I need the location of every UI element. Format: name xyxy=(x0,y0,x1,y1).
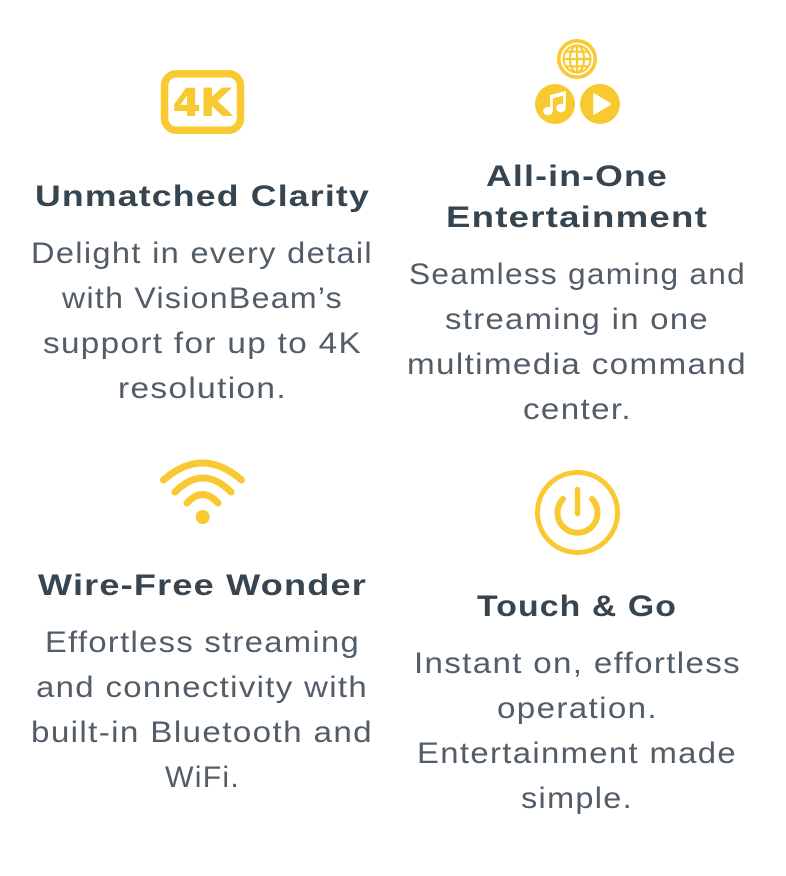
panel: Wire-Free Wonder xyxy=(31,463,373,794)
text: Touch & Go description xyxy=(414,647,741,815)
text: Wire-Free Wonder description: Effortless streaming xyxy=(45,626,360,659)
icon: 4K badge: 4K xyxy=(173,82,232,124)
icon: globe, music and play xyxy=(535,41,620,124)
text: All-in-One Entertainment description: multimedia command xyxy=(407,348,747,381)
panel: Unmatched Clarity xyxy=(31,74,373,405)
icon: globe xyxy=(559,41,595,77)
text: All-in-One Entertainment description: center. xyxy=(523,393,632,426)
text: Wire-Free Wonder description xyxy=(31,626,373,794)
heading: Touch & Go: Touch & Go xyxy=(477,590,677,623)
text: All-in-One Entertainment description: Seamless gaming and xyxy=(409,258,746,291)
heading: All-in-One Entertainment xyxy=(446,160,708,234)
text: Unmatched Clarity description xyxy=(31,237,373,405)
text: Unmatched Clarity description: with VisionBeam’s xyxy=(61,282,343,315)
icon: power button xyxy=(538,472,618,552)
heading: All-in-One Entertainment: Entertainment xyxy=(446,201,708,234)
text: Wire-Free Wonder description: and connectivity with xyxy=(36,671,368,704)
heading: Unmatched Clarity: Unmatched Clarity xyxy=(35,180,370,213)
text: Unmatched Clarity description: support for up to 4K xyxy=(43,327,362,360)
text: Touch & Go description: operation. xyxy=(497,692,658,725)
text: Wire-Free Wonder description: built-in Bluetooth and xyxy=(31,716,373,749)
text: Touch & Go description: Instant on, effortless xyxy=(414,647,741,680)
text: Touch & Go description: simple. xyxy=(521,782,633,815)
text: All-in-One Entertainment description xyxy=(407,258,747,426)
icon: 4K badge xyxy=(164,74,240,130)
text: Touch & Go description: Entertainment made xyxy=(417,737,737,770)
icon: music note xyxy=(535,84,575,124)
text: Unmatched Clarity description: Delight in every detail xyxy=(31,237,373,270)
icon: play button xyxy=(580,84,620,124)
panel: Touch & Go xyxy=(414,472,741,815)
icon: WiFi xyxy=(164,463,242,524)
heading: All-in-One Entertainment: All-in-One xyxy=(486,160,668,193)
heading: Wire-Free Wonder: Wire-Free Wonder xyxy=(38,569,367,602)
text: All-in-One Entertainment description: streaming in one xyxy=(445,303,709,336)
text: Unmatched Clarity description: resolution. xyxy=(118,372,287,405)
text: Wire-Free Wonder description: WiFi. xyxy=(165,761,240,794)
panel: All-in-One Entertainment xyxy=(407,41,747,426)
